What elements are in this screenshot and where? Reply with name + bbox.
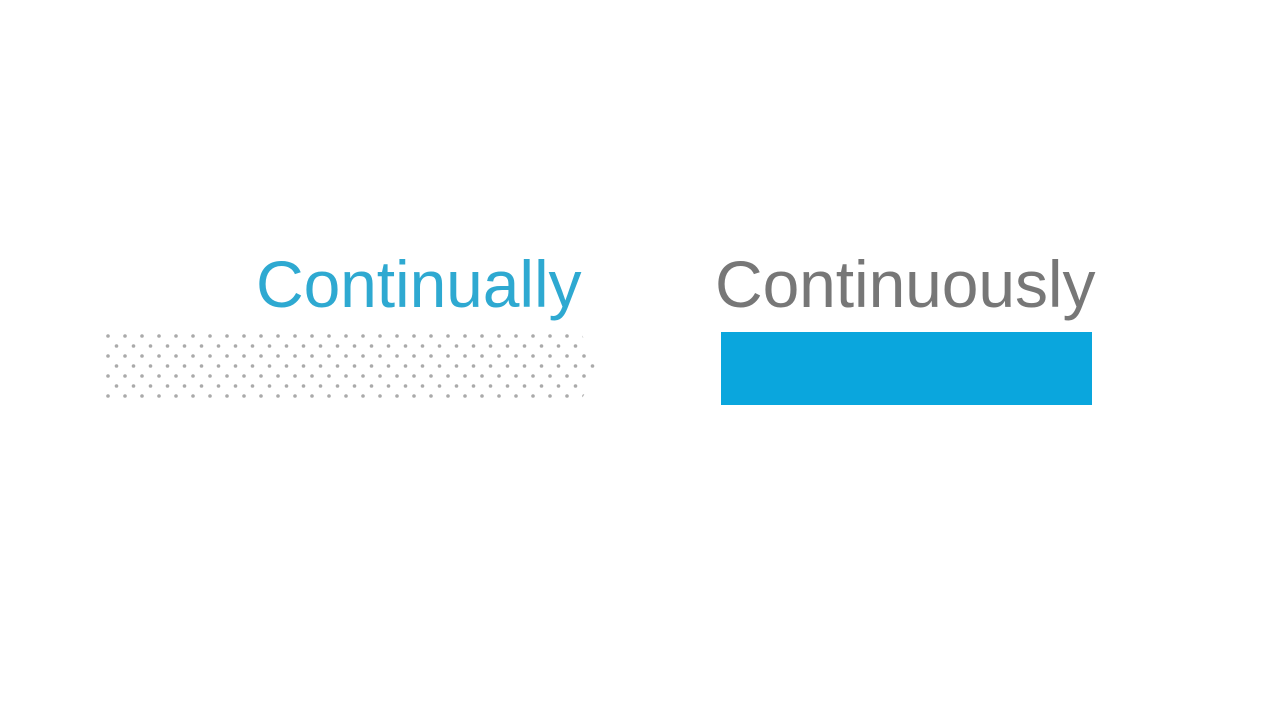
heading: Continually: Continually bbox=[256, 247, 581, 321]
solid bar: continuous bbox=[721, 332, 1092, 405]
heading: Continuously: Continuously bbox=[715, 247, 1095, 321]
dotted bar: intermittent bbox=[106, 334, 594, 398]
